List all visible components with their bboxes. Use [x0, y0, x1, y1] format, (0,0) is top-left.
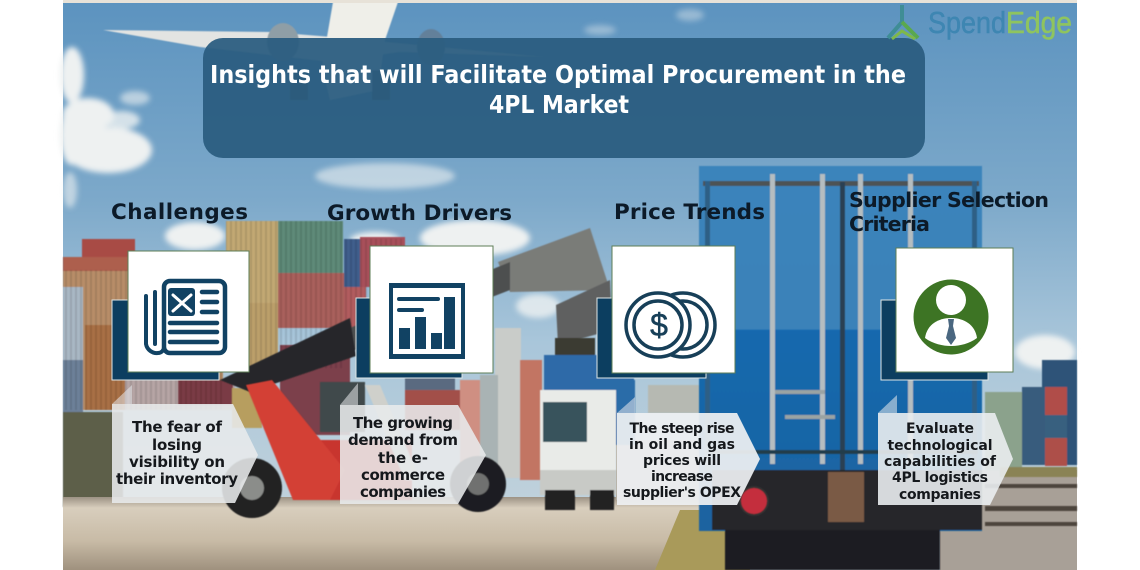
ground — [63, 497, 700, 570]
callout text: losing — [152, 436, 202, 454]
callout text: The steep rise — [630, 421, 734, 437]
forklift boom — [220, 228, 612, 392]
icon: report chart — [389, 283, 465, 359]
logo wordmark: Spend — [928, 5, 1006, 40]
callout text: their inventory — [116, 470, 238, 488]
callout arrow — [617, 397, 760, 505]
logo wordmark: Edge — [1006, 5, 1072, 40]
column: Supplier Selection Criteria — [849, 188, 1049, 505]
callout text — [116, 418, 238, 488]
dark offset block — [881, 300, 988, 380]
callout text: the e- — [378, 449, 428, 467]
icon: dollar coins: $ — [650, 307, 668, 343]
callout text: capabilities of — [884, 454, 997, 470]
callout text — [623, 421, 741, 501]
title panel — [203, 38, 925, 158]
container stacks left — [63, 221, 542, 507]
column: Price Trends — [597, 200, 765, 505]
icon: dollar coins — [626, 293, 715, 357]
callout text: in oil and gas — [629, 437, 735, 453]
icon: business person — [914, 280, 988, 354]
heading: Price Trends: Price Trends — [614, 200, 765, 225]
callout text: visibility on — [129, 453, 225, 471]
callout text: increase — [651, 469, 713, 485]
title text: Insights that will Facilitate Optimal Procurement in the — [210, 60, 906, 89]
callout arrow — [340, 383, 486, 504]
airplane — [103, 2, 545, 100]
callout text: 4PL logistics — [892, 470, 988, 486]
callout text — [884, 421, 997, 503]
title text — [210, 60, 906, 119]
heading: Supplier Selection Criteria: Criteria — [849, 212, 930, 236]
dark offset block — [356, 298, 462, 378]
clouds — [60, 9, 1075, 369]
callout text — [348, 414, 458, 501]
top photo strip — [63, 0, 1077, 3]
icon: newspaper — [146, 281, 225, 353]
truck — [540, 338, 700, 510]
heading: Supplier Selection Criteria — [849, 188, 1049, 236]
callout text: commerce — [361, 466, 445, 484]
title text: 4PL Market — [489, 90, 629, 119]
icon card — [370, 246, 493, 373]
forklift body — [222, 380, 506, 518]
callout text: companies — [899, 487, 981, 503]
callout text: Evaluate — [906, 421, 974, 437]
callout text: The fear of — [132, 418, 222, 436]
callout arrow — [878, 395, 1013, 505]
right stacks and rails — [985, 360, 1077, 526]
heading: Challenges: Challenges — [111, 200, 248, 225]
icon: logo mark — [888, 5, 918, 39]
callout text: The growing — [353, 414, 453, 432]
dark offset block — [112, 300, 219, 380]
blue freight container — [699, 166, 982, 570]
callout text: prices will — [643, 453, 721, 469]
heading: Supplier Selection Criteria: Supplier Selection — [849, 188, 1049, 212]
container corrugation — [63, 270, 223, 410]
heading: Growth Drivers: Growth Drivers — [327, 201, 512, 226]
column: Growth Drivers — [327, 201, 512, 504]
dark offset block — [597, 298, 706, 378]
callout text: companies — [360, 483, 446, 501]
icon card — [896, 248, 1013, 372]
SpendEdge logo — [888, 5, 1072, 40]
column: Challenges — [111, 200, 258, 503]
callout text: supplier's OPEX — [623, 485, 741, 501]
icon card — [128, 251, 249, 372]
callout text: technological — [888, 438, 992, 454]
callout text: demand from — [348, 431, 458, 449]
callout arrow — [112, 385, 258, 503]
icon card — [612, 246, 735, 373]
